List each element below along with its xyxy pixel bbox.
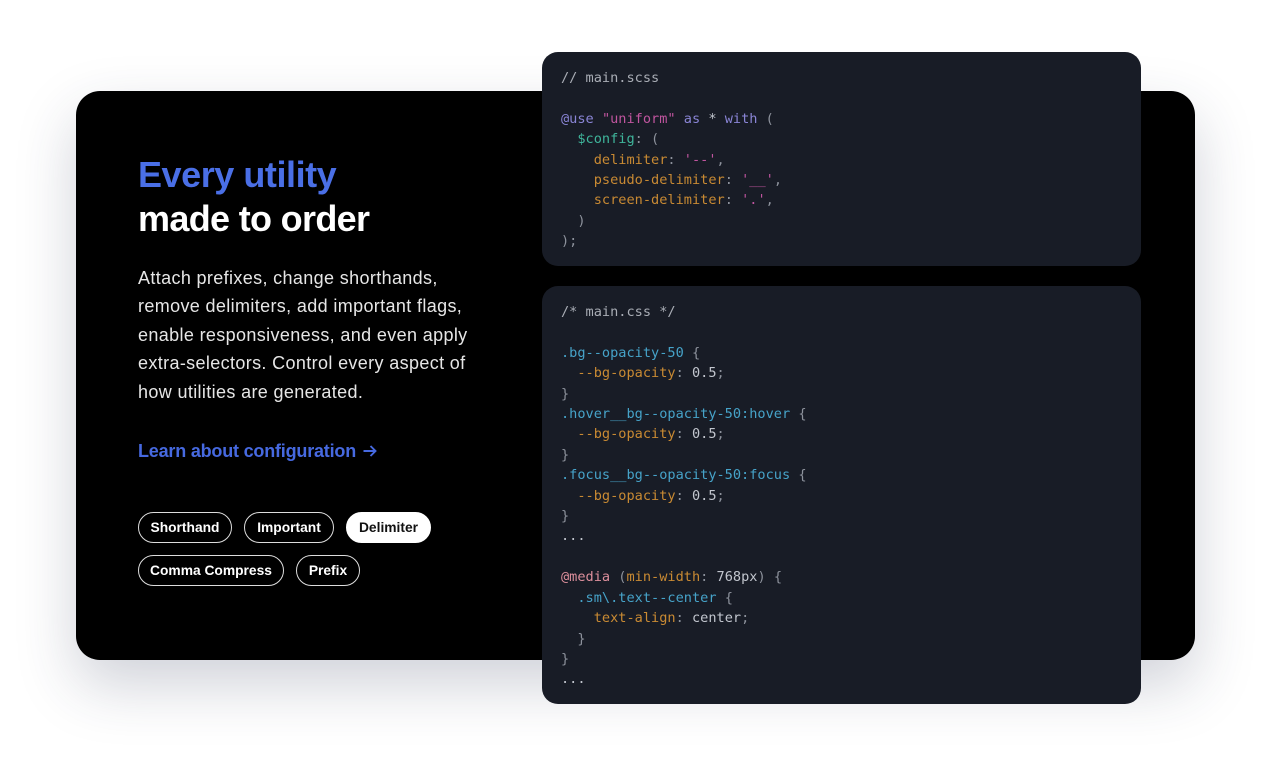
pill: Important: Important — [257, 520, 321, 535]
heading line: made to order: made to order — [138, 198, 369, 239]
pill: Delimiter (active) — [346, 512, 431, 543]
description text: remove delimiters, add important flags, — [138, 296, 462, 316]
pill: Delimiter (active): Delimiter — [359, 520, 418, 535]
pill: Important — [244, 512, 334, 543]
code panel: main.scss: // main.scss @use "uniform" as * with ( $config: ( delimiter: '--', pseudo-delimiter: '__', screen-delimiter: '.', ) ); — [561, 70, 782, 249]
code panel: main.css — [542, 286, 1141, 704]
description text: extra-selectors. Control every aspect of — [138, 353, 466, 373]
pill: Prefix — [296, 555, 360, 586]
code panel: main.scss — [542, 52, 1141, 266]
description text: how utilities are generated. — [138, 382, 363, 402]
pill: Comma Compress: Comma Compress — [150, 563, 272, 578]
pill: Shorthand — [138, 512, 232, 543]
description text — [138, 268, 468, 402]
pill: Shorthand: Shorthand — [150, 520, 219, 535]
panel: black card — [76, 91, 1195, 660]
description text: enable responsiveness, and even apply — [138, 325, 468, 345]
icon: arrow — [364, 445, 377, 457]
pill: Comma Compress — [138, 555, 284, 586]
heading line: Every utility: Every utility — [138, 154, 336, 195]
description text: Attach prefixes, change shorthands, — [138, 268, 438, 288]
pill: Prefix: Prefix — [309, 563, 347, 578]
code panel: main.css: /* main.css */ .bg--opacity-50 { --bg-opacity: 0.5; } .hover__bg--opacity-50:hover { --bg-opacity: 0.5; } .focus__bg--opacity-50:focus { --bg-opacity: 0.5; } ... @media (min-width: 768px) { .sm\.text--center { text-align: center; } } ... — [561, 304, 807, 687]
link: learn about configuration: Learn about configuration — [138, 441, 356, 461]
